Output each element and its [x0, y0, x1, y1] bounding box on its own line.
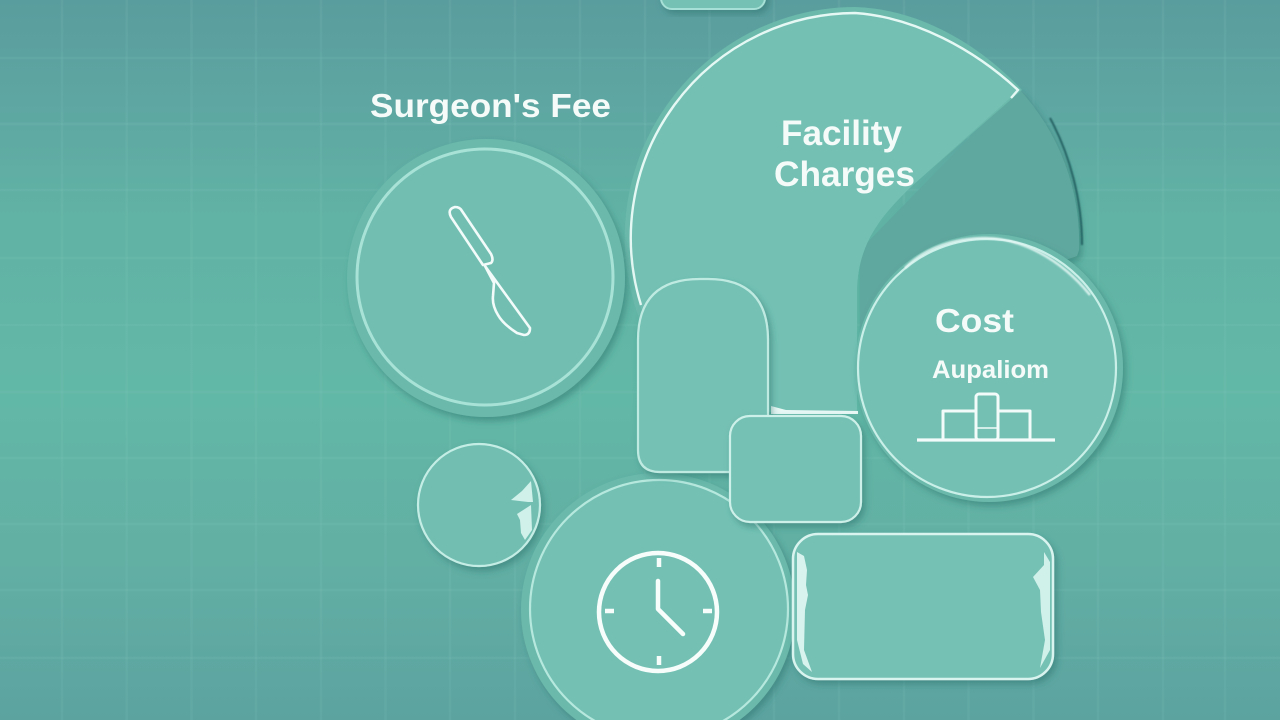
- icon: clock: [599, 553, 717, 671]
- bottom white edge: [771, 406, 858, 414]
- dark wedge rim: [1050, 118, 1082, 245]
- panel: facility charges: [625, 7, 1082, 414]
- top tab: [661, 0, 765, 9]
- light sector fill: [630, 13, 1018, 412]
- panel: small rounded card: [730, 416, 861, 522]
- heading: surgeon's fee: Surgeon's Fee: [370, 87, 611, 124]
- sub label: Aupaliom: [932, 356, 1049, 384]
- panel: surgeon's fee circle: [347, 139, 625, 417]
- panel: tall rounded card: [638, 279, 768, 472]
- icon: scalpel: [450, 207, 530, 335]
- panel: wide rounded card: [793, 534, 1053, 679]
- light sector rim: [631, 13, 1018, 305]
- facility label: [774, 114, 915, 194]
- facility label: Facility: [781, 114, 903, 153]
- cost label: Cost: [935, 302, 1014, 339]
- panel: clock circle: [521, 473, 795, 720]
- panel: small circle: [418, 444, 540, 566]
- left frayed highlight: [797, 552, 812, 672]
- panel: cost circle: [855, 234, 1123, 502]
- frayed rim highlight: [905, 238, 1090, 295]
- right frayed highlight: [1033, 552, 1050, 668]
- light sector halo: [625, 7, 1022, 412]
- dark wedge segment: [860, 88, 1079, 330]
- icon: bars on baseline: [917, 394, 1055, 440]
- frayed highlight: [511, 481, 533, 540]
- facility label: Charges: [774, 155, 915, 194]
